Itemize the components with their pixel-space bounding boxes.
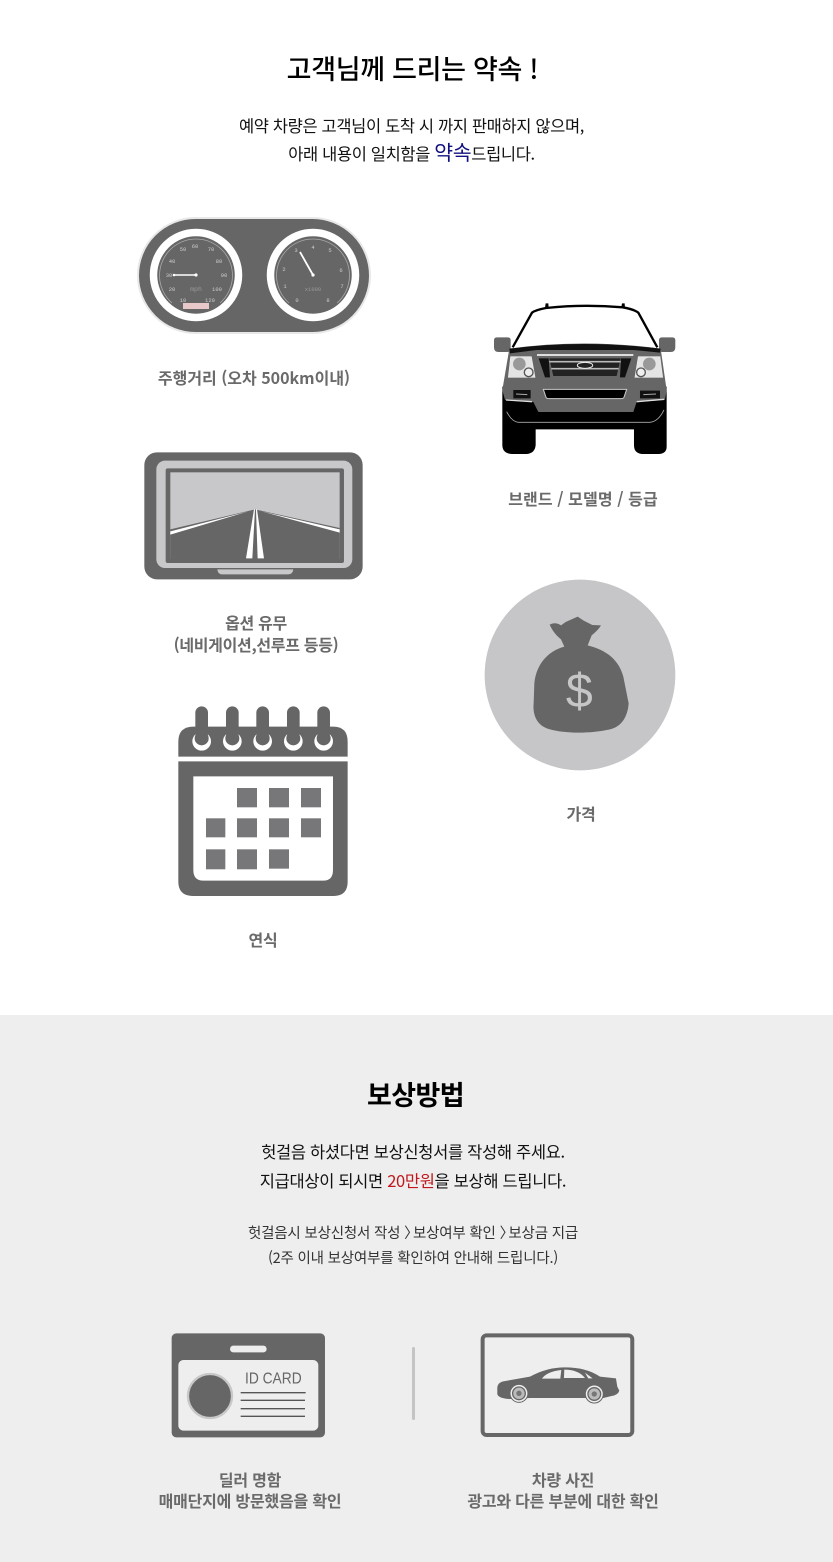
icon: dashboard gauges: 90: [221, 272, 227, 279]
process text: [248, 1222, 578, 1268]
label: mileage: 주행거리 (오차 500km이내): [158, 365, 350, 389]
label: dealer card: [159, 1467, 341, 1512]
icon: car photo: [480, 1333, 634, 1437]
intro text: 아래 내용이 일치함을 약속드립니다.: [288, 136, 535, 166]
icon: money bag: [484, 580, 676, 770]
icon: calendar: [178, 706, 348, 896]
divider: [412, 1347, 415, 1420]
icon: navigation screen: [144, 452, 363, 580]
icon: dashboard gauges: 8: [326, 297, 330, 304]
intro text: [239, 113, 584, 166]
icon: dashboard gauges: [137, 217, 371, 334]
icon: dashboard gauges: 7: [340, 283, 344, 290]
label: car photo: 차량 사진: [532, 1467, 594, 1491]
icon: dashboard gauges: 6: [339, 267, 343, 274]
label: options: [174, 610, 338, 656]
icon: ID card: [172, 1333, 325, 1438]
icon: dashboard gauges: 80: [216, 258, 222, 265]
icon: dashboard gauges: 100: [212, 286, 222, 293]
icon: dashboard gauges: 70: [208, 246, 214, 253]
icon: dashboard gauges: x1000: [305, 286, 321, 293]
icon: dashboard gauges: 10: [180, 297, 186, 304]
label: brand model grade: 브랜드 / 모델명 / 등급: [508, 486, 658, 510]
icon: SUV front view: [494, 303, 676, 454]
icon: dashboard gauges: mph: [190, 286, 202, 293]
icon: dashboard gauges: 30: [166, 272, 172, 279]
intro text: 예약 차량은 고객님이 도착 시 까지 판매하지 않으며,: [239, 113, 584, 137]
label: car photo: [467, 1467, 659, 1512]
label: dealer card: 매매단지에 방문했음을 확인: [159, 1488, 341, 1512]
label: options: (네비게이션,선루프 등등): [174, 632, 338, 656]
label: options: 옵션 유무: [225, 610, 287, 634]
icon: dashboard gauges: 20: [169, 286, 175, 293]
icon: dashboard gauges: 60: [192, 243, 198, 250]
icon: dashboard gauges: 5: [328, 247, 332, 254]
heading: compensation method: 보상방법: [367, 1074, 464, 1113]
icon: dashboard gauges: 40: [169, 258, 175, 265]
icon: dashboard gauges: 0: [295, 297, 299, 304]
icon: dashboard gauges: 120: [205, 297, 215, 304]
label: model year: 연식: [248, 927, 278, 951]
process text: (2주 이내 보상여부를 확인하여 안내해 드립니다.): [268, 1247, 558, 1268]
label: price: 가격: [566, 801, 596, 825]
compensation text: [260, 1139, 566, 1192]
icon: dashboard gauges: 2: [282, 266, 286, 273]
icon: dashboard gauges: 50: [180, 246, 186, 253]
label: car photo: 광고와 다른 부분에 대한 확인: [467, 1488, 659, 1512]
compensation text: 지급대상이 되시면 20만원을 보상해 드립니다.: [260, 1168, 566, 1192]
panel: compensation background: [0, 1015, 833, 1562]
icon: dashboard gauges: 1: [283, 283, 287, 290]
process text: 헛걸음시 보상신청서 작성 〉 보상여부 확인 〉 보상금 지급: [248, 1222, 578, 1243]
label: dealer card: 딜러 명함: [219, 1467, 281, 1491]
compensation text: 헛걸음 하셨다면 보상신청서를 작성해 주세요.: [261, 1139, 565, 1163]
title: 고객님께 드리는 약속 !: [287, 48, 538, 87]
icon: dashboard gauges: 4: [311, 244, 315, 251]
icon: dashboard gauges: 3: [294, 247, 298, 254]
icon: ID card: ID CARD: [245, 1371, 302, 1388]
icon: money bag: $: [566, 664, 593, 718]
